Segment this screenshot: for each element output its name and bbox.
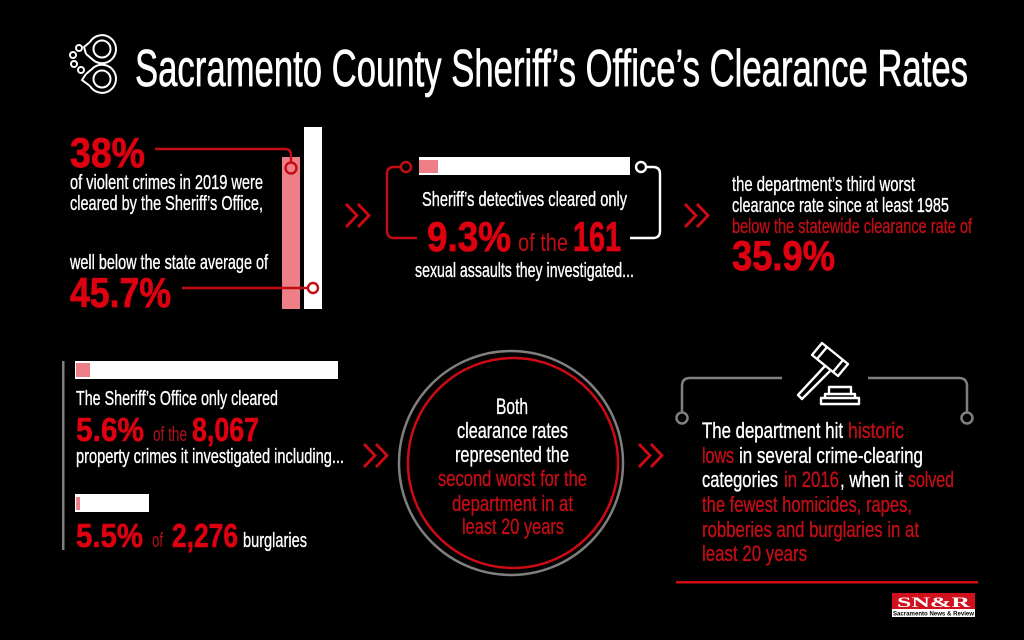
- text: sexual assaults: sexual assaults they investigated...: [415, 259, 634, 282]
- stat: 9.3 percent of 161: 161: [573, 213, 621, 260]
- text: second worst: least 20 years: [462, 514, 564, 539]
- stat: 5.6 percent of 8,067: [76, 412, 259, 449]
- text: department hit historic lows: in several crime-clearing: [739, 443, 923, 468]
- icon: gavel: [798, 343, 859, 404]
- panel: circle callout: [399, 351, 623, 575]
- text: department hit historic lows: , when it: [840, 467, 904, 492]
- text: department hit historic lows: the fewest homicides, rapes,: [702, 492, 912, 517]
- text: both clearance rates: Both: [496, 394, 528, 419]
- text: second worst: department in at: [452, 491, 574, 516]
- logo: SN&R: [892, 593, 975, 618]
- stat: 5.5 percent of 2,276 burglaries: burglaries: [243, 529, 307, 552]
- text: department hit historic lows: in 2016: [784, 467, 839, 492]
- panel: sexual assaults: [387, 157, 660, 282]
- arrow: chevrons 4: [639, 444, 662, 467]
- text: both clearance rates: represented the: [455, 442, 569, 467]
- text: department hit historic lows: robberies and burglaries in at: [702, 517, 920, 542]
- stat: 5.5 percent of 2,276 burglaries: [76, 518, 307, 555]
- stat: 9.3 percent of 161: [427, 213, 621, 260]
- text: department hit historic lows: The department hit: [702, 418, 844, 443]
- bracket: right: [630, 162, 660, 238]
- ring: inner red: [408, 358, 618, 568]
- text: detectives: Sheriff’s detectives cleared only: [422, 188, 628, 211]
- text: violent crimes cleared: cleared by the Sheriff’s Office,: [70, 192, 263, 215]
- stat: 5.5 percent of 2,276 burglaries: 5.5%: [76, 518, 143, 555]
- text: state average: well below the state average of: [69, 251, 268, 274]
- text: violent crimes cleared: [70, 171, 263, 215]
- progress bar: 9.3 percent: [419, 157, 630, 175]
- stat: 5.6 percent of 8,067: of the: [153, 424, 187, 446]
- bar chart: sheriff vs state: [155, 127, 322, 309]
- text: department hit historic lows: [702, 418, 954, 566]
- logo: SN&R: Sacramento News & Review: [893, 610, 975, 618]
- stat: 38 percent: 38%: [70, 129, 145, 176]
- divider: left rule: [62, 361, 64, 550]
- text: second worst: [438, 466, 587, 539]
- progress bar: 5.5 percent: [75, 494, 149, 512]
- logo: SN&R: SN&R: [897, 595, 970, 611]
- text: department hit historic lows: lows: [702, 443, 734, 468]
- panel: violent crimes: [69, 127, 322, 316]
- text: department hit historic lows: solved: [908, 467, 954, 492]
- text: violent crimes cleared: of violent crimes in 2019 were: [70, 171, 263, 194]
- text: both clearance rates: clearance rates: [457, 418, 568, 443]
- panel: property crimes: [62, 361, 344, 555]
- text: department hit historic lows: categories: [702, 467, 778, 492]
- stat: 45.7 percent: 45.7%: [70, 269, 171, 316]
- stat: 5.5 percent of 2,276 burglaries: of: [152, 530, 163, 552]
- text: property crimes: property crimes it investigated including...: [76, 445, 344, 468]
- arrow: chevrons 1: [346, 204, 369, 227]
- text: second worst: second worst for the: [438, 466, 587, 491]
- stat: 5.6 percent of 8,067: 8,067: [192, 412, 259, 449]
- bracket: grey: [676, 378, 972, 424]
- stat: 9.3 percent of 161: of the: [518, 229, 568, 257]
- stat: 5.5 percent of 2,276 burglaries: 2,276: [172, 518, 238, 555]
- arrow: chevrons 3: [364, 444, 387, 467]
- arrow: chevrons 2: [685, 204, 708, 227]
- bracket: left: [387, 162, 417, 238]
- stat: 5.6 percent of 8,067: 5.6%: [76, 412, 144, 449]
- stat: 35.9 percent: 35.9%: [732, 232, 835, 279]
- text: only cleared: The Sheriff’s Office only cleared: [76, 387, 278, 410]
- icon: handcuffs: [70, 35, 116, 93]
- text: both clearance rates: [455, 394, 569, 467]
- text: department hit historic lows: historic: [848, 418, 904, 443]
- text: third worst rate: the department’s third worst: [732, 173, 915, 196]
- text: third worst rate: [732, 173, 949, 217]
- ring: outer grey: [399, 351, 623, 575]
- panel: third worst: [732, 173, 972, 279]
- text: department hit historic lows: least 20 years: [702, 541, 807, 566]
- progress bar: 5.6 percent: [75, 361, 338, 379]
- stat: 9.3 percent of 161: 9.3%: [427, 213, 511, 260]
- panel: historic lows: [676, 343, 978, 584]
- rule: red: [676, 581, 978, 584]
